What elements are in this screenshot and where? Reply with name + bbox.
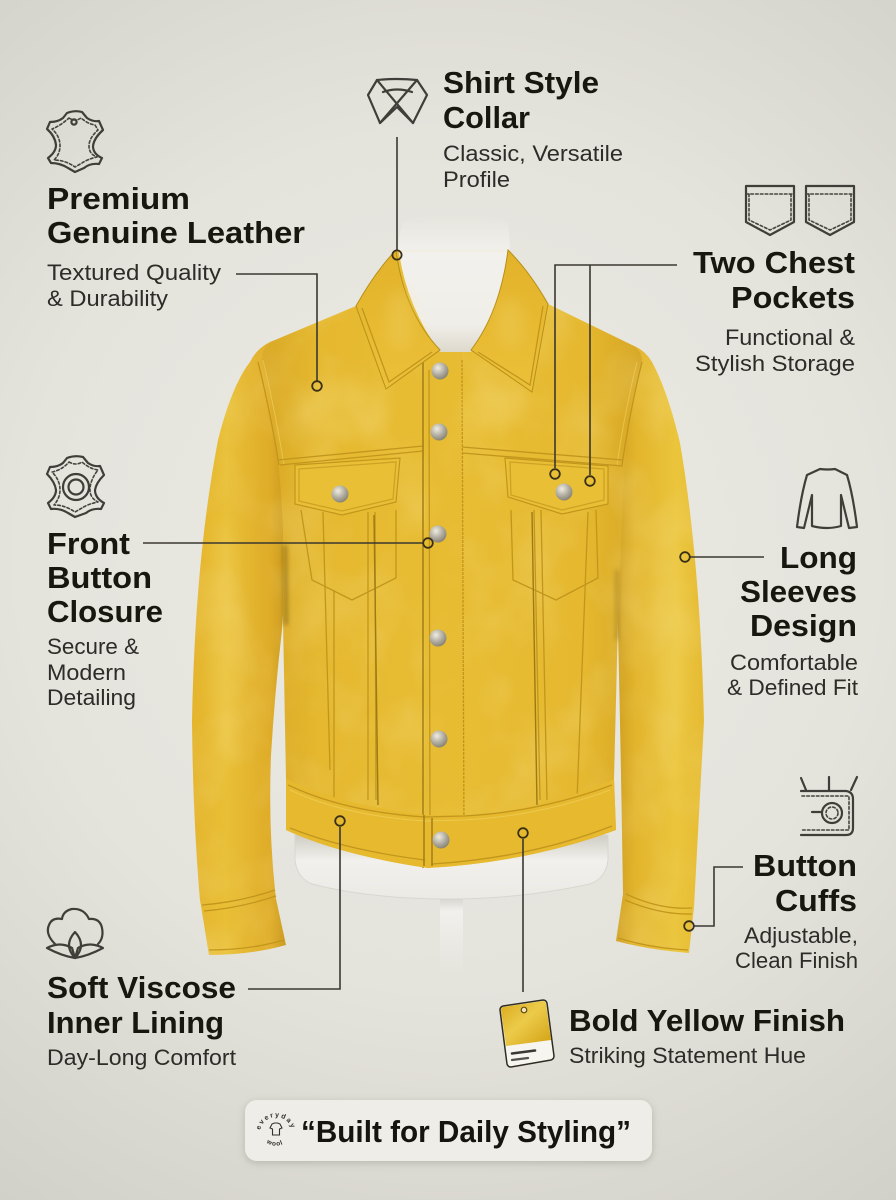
collar right [471,250,548,392]
front placket [423,352,464,868]
text: collar: Classic, Versatile [443,141,623,166]
icon: leather hide [47,111,103,172]
icon: button badge [47,456,104,517]
heading: button closure: Front [47,526,130,561]
left chest pocket stitching [301,510,396,805]
armpit shadows [285,545,617,640]
text: pockets: Functional & [725,325,855,350]
callout: genuine leather [47,111,322,391]
right pocket flap [505,458,608,514]
jacket buttons [332,362,572,848]
heading: viscose: Soft Viscose [47,970,236,1005]
icon: cuff [801,777,857,835]
text: cuffs: Clean Finish [735,948,858,973]
callout: front button closure [47,456,433,710]
leader line: collar [392,137,402,260]
left sleeve [192,340,290,955]
text: button closure: Detailing [47,685,136,710]
heading: collar: Collar [443,100,530,135]
text: leather: Textured Quality [47,260,222,285]
mannequin stand [440,895,463,980]
callout: long sleeves [680,469,859,700]
text: long sleeves [727,650,859,700]
icon: cotton boll [47,909,103,958]
heading: button closure: Closure [47,594,163,629]
leader line: long sleeves [680,552,764,562]
tagline pill [242,1099,655,1166]
jacket [185,214,710,960]
heading: pockets: Two Chest [693,245,855,280]
light highlights [211,290,684,780]
neck of mannequin [398,214,510,352]
heading: long sleeves: Design [750,608,857,643]
right sleeve [612,345,704,953]
heading: pockets: Pockets [731,280,855,315]
waistband [286,779,616,868]
icon: long sleeve shirt [797,469,857,528]
right chest pocket stitching [511,510,598,805]
tagline text: “Built for Daily Styling” [301,1114,631,1149]
heading: leather: Premium [47,181,190,216]
heading: yellow finish: Bold Yellow Finish [569,1003,845,1038]
leader line: cuffs [684,867,743,931]
callout: shirt style collar [368,65,623,260]
heading: leather: Genuine Leather [47,215,305,250]
icon: collar [368,79,427,123]
heading: cuffs [753,848,857,918]
heading: cuffs: Cuffs [775,883,857,918]
logo badge [257,1113,295,1146]
yoke seam [278,446,623,466]
heading: cuffs: Button [753,848,857,883]
text: button closure [47,634,139,710]
heading: collar: Shirt Style [443,65,599,100]
right cuff [618,894,692,950]
callout: button cuffs [684,777,858,973]
logo badge: everyday [257,1113,295,1130]
heading: collar [443,65,599,135]
text: button closure: Secure & [47,634,139,659]
collar left [356,250,440,389]
heading: button closure [47,526,163,629]
text: cuffs [735,923,858,973]
leader line: viscose [248,816,345,989]
text: collar [443,141,623,192]
text: pockets [695,325,855,376]
text: cuffs: Adjustable, [744,923,858,948]
text: long sleeves: Comfortable [730,650,858,675]
leader line: button closure [143,538,433,548]
text: viscose: Day-Long Comfort [47,1045,237,1070]
leader lines: pockets [550,265,677,486]
callout: viscose lining [47,816,345,1070]
heading: long sleeves: Long [780,540,857,575]
left cuff [202,890,284,950]
armhole seams [258,360,642,465]
text: leather [47,260,222,311]
leather mottling [185,245,710,960]
heading: long sleeves [740,540,857,643]
leader line: leather [236,274,322,391]
heading: long sleeves: Sleeves [740,574,857,609]
heading: pockets [693,245,855,315]
text: button closure: Modern [47,660,126,685]
text: pockets: Stylish Storage [695,351,855,376]
heading: button closure: Button [47,560,152,595]
icon: pockets [746,186,854,235]
icon: colour swatch tag [500,1000,554,1067]
heading: viscose [47,970,236,1040]
callout: two chest pockets [550,186,855,486]
mannequin torso base [295,835,608,899]
leader line: yellow finish [518,828,528,992]
logo badge: wool [267,1140,282,1146]
text: collar: Profile [443,167,510,192]
text: yellow finish: Striking Statement Hue [569,1043,806,1068]
text: leather: & Durability [47,286,169,311]
callout: bold yellow finish [500,828,845,1068]
heading: viscose: Inner Lining [47,1005,224,1040]
text: long sleeves: & Defined Fit [727,675,859,700]
jacket body [262,250,642,868]
heading: leather [47,181,305,250]
left pocket flap [295,458,400,515]
